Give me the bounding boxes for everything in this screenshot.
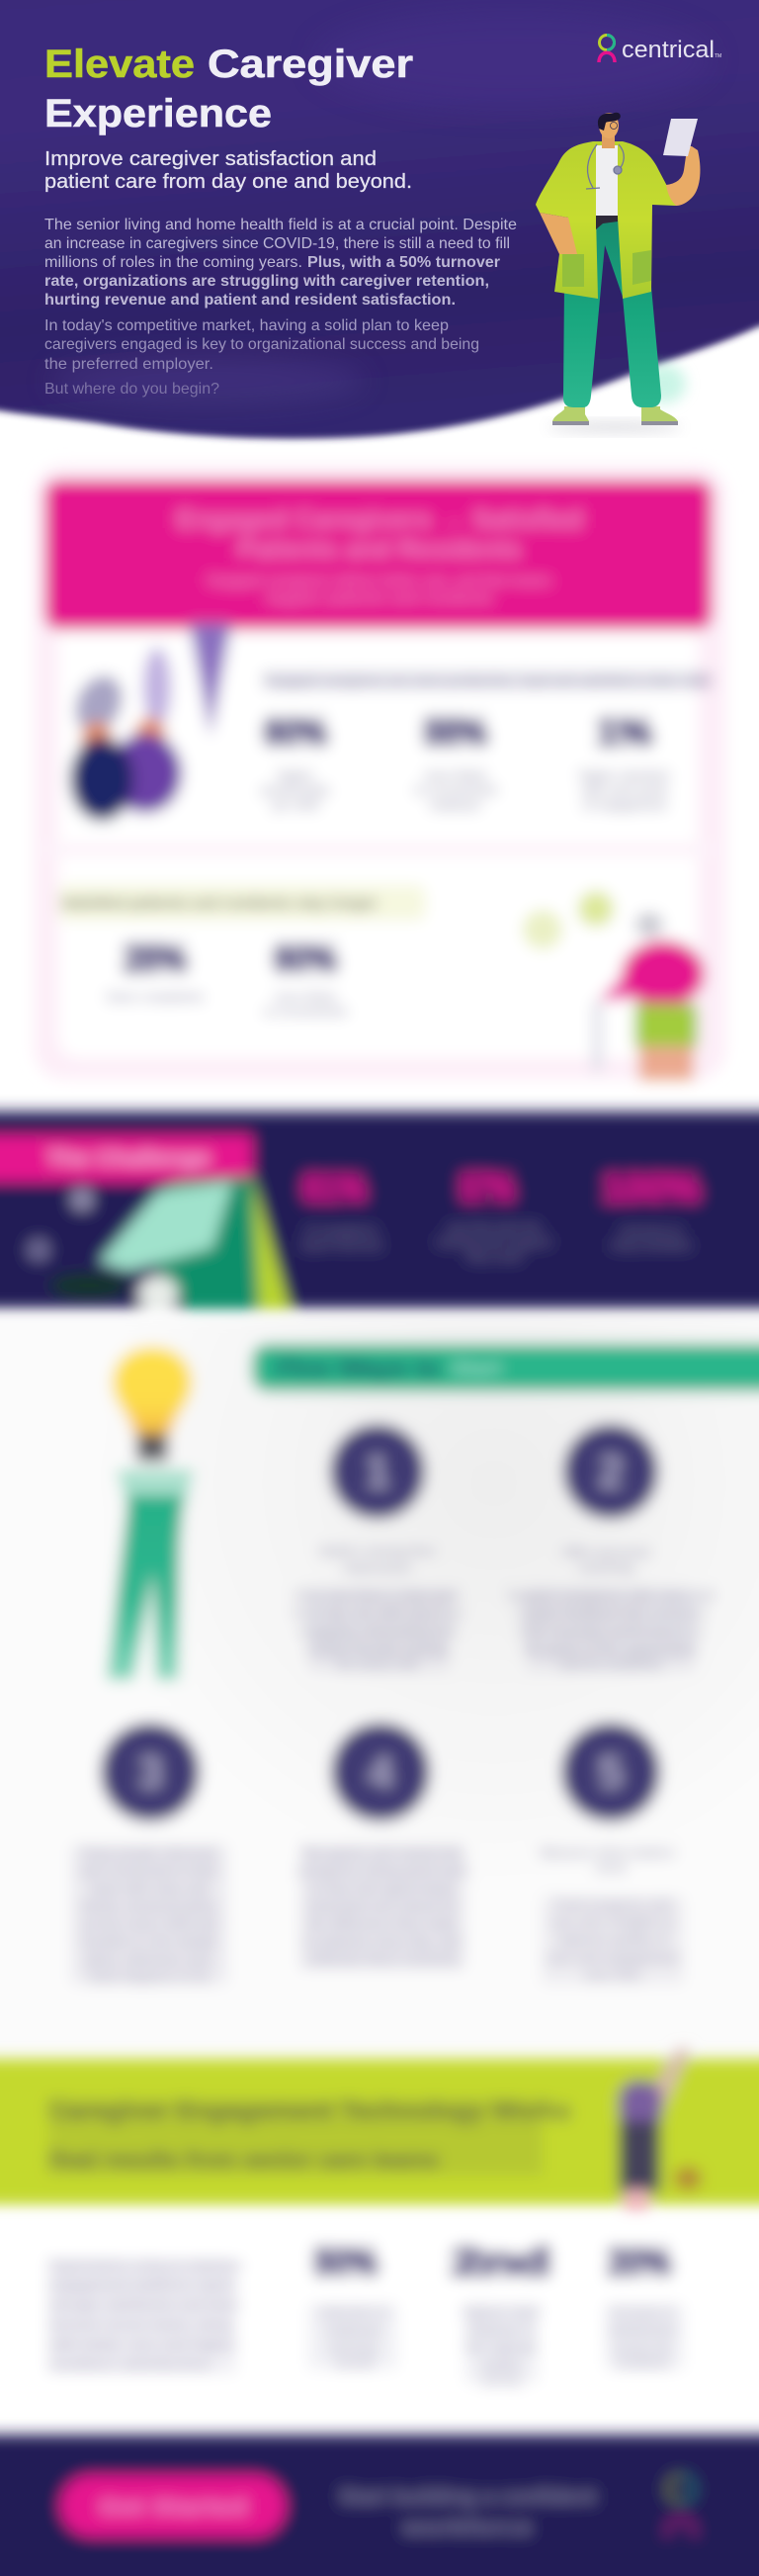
step 2: Support caregivers with clear and	[508, 1588, 714, 1603]
footer logo mark	[667, 2476, 695, 2536]
step 4: celebrate these moments	[305, 1952, 460, 1967]
step 2: coaching	[577, 1560, 634, 1575]
result stats: 2nd	[452, 2242, 550, 2283]
step 4: to patients every day, and	[304, 1934, 461, 1949]
step 5: Measure what matters	[541, 1845, 675, 1860]
step 4: Recognize and reward the	[302, 1845, 463, 1860]
result stats: the regional	[466, 2341, 536, 2354]
panel: five steps	[0, 1315, 759, 2067]
hero body text	[44, 217, 517, 398]
logo: centrical: centrical	[622, 37, 715, 63]
result stats: 20%	[608, 2242, 671, 2283]
panel: results statistics	[0, 2215, 759, 2428]
step 4: so they feel appreciated,	[307, 1881, 458, 1896]
stats: say they lack the	[447, 1220, 542, 1234]
stat row 1: higher retention	[579, 768, 670, 782]
logo: centrical: TM	[715, 53, 721, 59]
illustration: lightbulb and caregiver	[107, 1347, 194, 1680]
hero body text: Plus, with a 50% turnover	[307, 254, 500, 271]
step 1: for every role	[337, 1657, 418, 1672]
step 1: Give new hires a clear path	[295, 1588, 461, 1603]
lab coat	[536, 141, 676, 299]
result stats: satisfaction	[608, 2323, 677, 2337]
result stats: reduction in	[318, 2305, 389, 2319]
step banner: Five Ways to	[276, 1356, 441, 1380]
footer text	[339, 2484, 597, 2539]
stat row 2: more likely	[275, 990, 337, 1004]
stat row 1: 1%	[597, 712, 652, 754]
step 3: Keep people informed	[82, 1845, 216, 1860]
hero subheading: Improve caregiver satisfaction and	[44, 148, 377, 170]
result stats: survey	[481, 2374, 521, 2388]
illustration: celebrating caregiver	[619, 2049, 702, 2215]
panel: engaged caregivers	[34, 465, 726, 1080]
illustration: caregiver with clipboard	[536, 113, 700, 432]
stat row 1: to recommend	[415, 783, 496, 797]
stethoscope	[586, 144, 624, 189]
coat pockets	[562, 250, 651, 287]
result stats: market	[480, 2358, 522, 2372]
step 5: use your insights to	[551, 1914, 674, 1929]
hero body text: In today's competitive market, having a solid plan to keep	[44, 317, 449, 334]
step 3: team happens to be	[89, 1970, 210, 1985]
step 1: 1	[365, 1446, 390, 1497]
stat row 2: 25%	[124, 938, 187, 980]
step 1: from day one with easy and	[294, 1606, 462, 1621]
step 1	[294, 1424, 462, 1672]
step 5: Track progress and	[553, 1897, 672, 1911]
call-to-action button: Get Started	[99, 2497, 247, 2519]
stat row 2	[107, 938, 346, 1019]
result stats: scores for	[613, 2341, 672, 2354]
stat row 1: more likely	[425, 768, 487, 782]
scrub trousers	[563, 218, 661, 407]
call-to-action button	[60, 2475, 286, 2536]
step banner: Start	[452, 1356, 502, 1380]
results paragraph: stronger satisfaction and lower	[48, 2297, 240, 2312]
stats: 100%	[603, 1168, 700, 1209]
stats: of caregivers	[304, 1223, 379, 1237]
stat row 2: fewer complaints	[107, 990, 204, 1004]
panel header: Engaged Caregivers → Satisfied	[176, 504, 583, 534]
step 5: improve quality of	[557, 1932, 669, 1947]
results paragraph: Organizations using an employee	[48, 2258, 242, 2272]
banner heading: Real results from senior care teams	[48, 2147, 439, 2174]
stats: training and support	[437, 1235, 551, 1249]
step 2: 2	[598, 1446, 624, 1497]
step 3: location in one simple	[82, 1934, 216, 1949]
stats: many facilities	[611, 1238, 693, 1252]
results paragraph: engagement platform report	[48, 2277, 237, 2292]
step 4: the difference they make	[307, 1916, 458, 1931]
step 3: place, wherever your	[85, 1952, 213, 1967]
subheading: patients: Satisfied patients and residents stay longer	[61, 895, 378, 912]
stat row 1: per shift	[272, 798, 319, 812]
step 4: caregivers doing great work	[296, 1863, 468, 1878]
ribbon heading: The Challenge	[47, 1148, 210, 1170]
stats: turnover in	[621, 1223, 682, 1237]
head	[598, 113, 621, 148]
step 2: the goals of the organization	[524, 1642, 699, 1656]
hero body text: hurting revenue and patient and resident satisfaction.	[44, 292, 456, 309]
hero subheading: patient care from day one and beyond.	[44, 171, 412, 193]
ribbon heading	[0, 1135, 252, 1182]
illustration: caregivers with raised arms	[66, 623, 231, 821]
step 3: across every shift and	[81, 1916, 217, 1931]
step 5: care and engagement	[547, 1950, 679, 1965]
illustration: colour wedge	[27, 1176, 291, 1311]
panel header: Engaged caregivers deliver better care, and that means	[208, 573, 551, 589]
footer text: workforce	[401, 2515, 533, 2539]
step banner	[252, 1344, 759, 1391]
hero body text: an increase in caregivers since COVID-19, there is still a need to fill	[44, 235, 510, 252]
hero body text: caregivers engaged is key to organizational success and being	[44, 336, 479, 353]
hero title	[44, 43, 413, 135]
step 3: and connected to their	[80, 1863, 218, 1878]
results paragraph: with better care and higher	[47, 2337, 236, 2352]
panel header: happier patients and residents	[266, 590, 493, 607]
panel header	[44, 480, 713, 630]
stat row 1: higher	[278, 768, 314, 782]
step 5: 5	[598, 1746, 624, 1798]
shirt	[596, 145, 618, 216]
step 5	[541, 1723, 684, 1984]
stats: they need	[466, 1250, 522, 1264]
stat row 2: 60%	[274, 938, 337, 980]
hero body text: millions of roles in the coming years.	[44, 254, 302, 271]
step 5: over time	[584, 1968, 641, 1983]
hero panel background	[0, 0, 759, 439]
footer text: Start building a confident	[339, 2484, 597, 2509]
result stats: highest rated	[463, 2305, 540, 2319]
result stats: employee	[325, 2323, 382, 2337]
step 2: their everyday performance to	[519, 1624, 703, 1639]
panel: results banner	[0, 2049, 759, 2215]
step 3	[71, 1723, 227, 1985]
step 4	[296, 1723, 468, 1969]
step 2: Offer personal	[562, 1545, 649, 1559]
stats: 57%	[461, 1168, 514, 1209]
stat row 1: of engagement	[582, 798, 667, 812]
shoes	[552, 406, 678, 425]
hero title: Experience	[44, 92, 272, 135]
stats	[299, 1168, 700, 1264]
footer panel	[0, 2435, 759, 2576]
banner heading: Caregiver Engagement Technology Works	[48, 2095, 571, 2125]
step 3: 3	[137, 1746, 163, 1798]
panel: dark statistics band	[0, 1111, 759, 1311]
result stats: increase in	[610, 2305, 675, 2319]
hero title: Elevate	[44, 43, 195, 86]
step 2: regular feedback that connects	[516, 1606, 706, 1621]
logo: centrical	[599, 36, 721, 63]
hero body text: the preferred employer.	[44, 356, 213, 373]
step 2: and its residents	[559, 1657, 662, 1672]
stat row 1: 55%	[424, 712, 487, 754]
step 3: team with clear and	[90, 1881, 209, 1896]
arms and hand	[540, 213, 577, 254]
illustration: resident with cane	[523, 891, 705, 1080]
result stats: 50%	[314, 2242, 378, 2283]
stat row 2: to recommend	[265, 1005, 346, 1019]
hero subheading	[44, 148, 412, 193]
hero body text: But where do you begin?	[44, 381, 219, 398]
hero body text: The senior living and home health field is at a crucial point. Despite	[44, 217, 517, 233]
hero title: Caregiver	[208, 43, 413, 86]
step 4: motivated and valued for	[306, 1899, 459, 1913]
step 1: engaging onboarding and	[298, 1624, 457, 1639]
step 5: most	[595, 1860, 627, 1875]
stat row 1: with each point	[580, 783, 668, 797]
result stats: employer in	[466, 2323, 536, 2337]
result stats: turnover	[329, 2341, 379, 2354]
stat row 1: employer	[429, 798, 482, 812]
results paragraph	[47, 2258, 242, 2373]
result stats: overall	[334, 2356, 374, 2370]
subheading: patients	[58, 885, 426, 921]
stat row 1: 60%	[264, 712, 327, 754]
results paragraph: resident satisfaction	[48, 2356, 211, 2371]
step 1: impression	[343, 1560, 412, 1575]
clipboard paper	[663, 119, 698, 156]
step 1: mobile-friendly training	[306, 1642, 449, 1656]
stat row 1	[262, 712, 670, 812]
result stats: residents	[615, 2356, 670, 2370]
step 2	[508, 1424, 714, 1672]
results paragraph: turnover across teams, along	[48, 2317, 232, 2332]
stats: 61%	[302, 1168, 366, 1209]
banner heading	[48, 2095, 571, 2176]
step 4: 4	[368, 1746, 393, 1798]
panel header: Patients and Residents	[237, 534, 522, 564]
stats: report burnout	[299, 1238, 382, 1252]
stat row 1: productivity	[262, 783, 330, 797]
step 1: Build a strong first	[320, 1544, 435, 1558]
result stats	[308, 2242, 684, 2388]
hero body text: rate, organizations are struggling with caregiver retention,	[44, 273, 489, 290]
step 3: timely communication	[81, 1899, 217, 1913]
